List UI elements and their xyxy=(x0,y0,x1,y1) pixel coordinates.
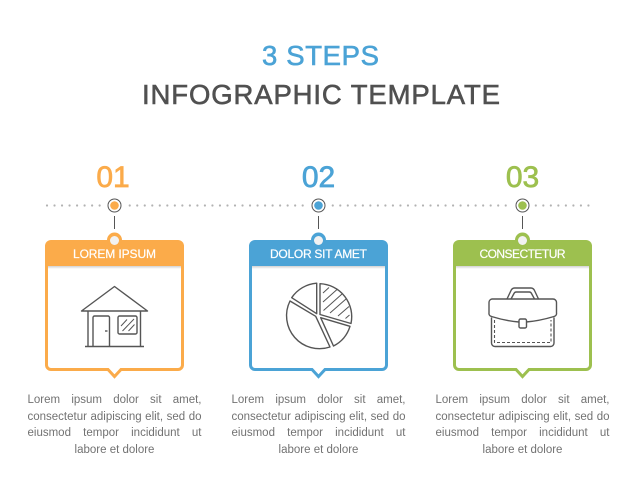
title: infographic template: INFOGRAPHIC TEMPLATE xyxy=(142,79,500,110)
step 3 xyxy=(453,161,592,378)
description 1: eiusmod tempor incididunt ut xyxy=(28,427,202,439)
card 2 heading: DOLOR SIT AMET xyxy=(270,247,368,261)
description 1: consectetur adipiscing elit, sed do xyxy=(28,411,202,423)
number 03: 03 xyxy=(506,161,539,194)
description 1: labore et dolore xyxy=(75,444,154,456)
description 2 xyxy=(232,394,406,456)
description 1 xyxy=(28,394,202,456)
description 2: labore et dolore xyxy=(279,444,358,456)
step 1 xyxy=(45,161,184,378)
description 2: eiusmod tempor incididunt ut xyxy=(232,427,406,439)
card 1 xyxy=(45,232,184,378)
card 3 xyxy=(453,232,592,378)
card 2 xyxy=(249,232,388,378)
dotted timeline xyxy=(47,194,591,218)
icon: pie chart xyxy=(287,283,352,349)
icon: house xyxy=(82,286,148,346)
description 3: eiusmod tempor incididunt ut xyxy=(436,427,610,439)
description 2: consectetur adipiscing elit, sed do xyxy=(232,411,406,423)
number 02: 02 xyxy=(302,161,335,194)
timeline node 1 xyxy=(108,199,121,229)
description 3: consectetur adipiscing elit, sed do xyxy=(436,411,610,423)
description 3: labore et dolore xyxy=(483,444,562,456)
step 2 xyxy=(249,161,592,378)
description 3: Lorem ipsum dolor sit amet, xyxy=(436,394,610,406)
timeline node 2 xyxy=(312,199,325,229)
title: 3 steps: 3 STEPS xyxy=(262,40,379,71)
timeline node 3 xyxy=(516,199,529,229)
description 1: Lorem ipsum dolor sit amet, xyxy=(28,394,202,406)
card 3 heading: CONSECTETUR xyxy=(480,247,566,261)
description 3 xyxy=(436,394,610,456)
icon: briefcase xyxy=(489,288,557,347)
number 01: 01 xyxy=(96,161,130,194)
card 1 heading: LOREM IPSUM xyxy=(73,247,156,261)
description 2: Lorem ipsum dolor sit amet, xyxy=(232,394,406,406)
